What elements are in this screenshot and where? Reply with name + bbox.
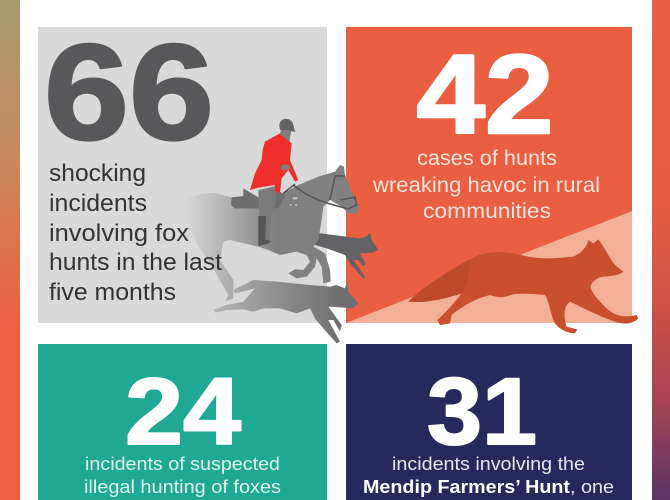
description: cases of hunts	[417, 147, 557, 170]
panel: 42 cases	[346, 27, 638, 333]
description: wreaking havoc in rural	[372, 174, 600, 197]
description: incidents involving the	[392, 453, 585, 474]
description: illegal hunting of foxes	[84, 476, 281, 497]
right gradient border	[652, 0, 670, 500]
description	[84, 453, 281, 497]
description	[363, 453, 614, 497]
number 66: 66	[44, 16, 214, 168]
light triangle	[346, 211, 632, 323]
boot	[258, 216, 272, 246]
illustration: huntsman on horse with hounds	[185, 119, 378, 343]
bridle and reins	[283, 176, 357, 209]
hound behind horse	[310, 233, 378, 278]
description	[372, 147, 600, 223]
saddle	[231, 188, 286, 208]
description: 66 incidents: involving fox	[49, 220, 189, 247]
breeches	[258, 186, 277, 242]
description: communities	[423, 200, 551, 223]
description: 66 incidents: shocking	[49, 160, 146, 187]
rider	[250, 119, 298, 246]
horse	[185, 165, 359, 302]
panel: 31 incidents	[346, 344, 632, 500]
riding helmet	[279, 119, 296, 132]
description: , one	[570, 476, 614, 497]
left gradient border	[0, 0, 20, 500]
front hound	[214, 280, 358, 343]
breastplate marks	[289, 197, 298, 206]
description: incidents of suspected	[85, 453, 280, 474]
icon: running fox	[408, 239, 638, 333]
number 42: 42	[416, 32, 554, 157]
face	[280, 127, 292, 142]
hand	[281, 164, 290, 170]
red jacket	[250, 133, 298, 193]
description: 66 incidents	[49, 160, 222, 306]
number 31: 31	[427, 359, 537, 465]
description: 66 incidents: hunts in the last	[49, 249, 222, 276]
panel: 24 incidents	[38, 344, 327, 500]
description: Mendip Farmers’ Hunt	[363, 476, 570, 497]
panel: grey background with 66	[38, 16, 327, 323]
description: 66 incidents: five months	[49, 279, 176, 306]
description: 66 incidents: incidents	[49, 190, 147, 217]
number 24: 24	[125, 359, 241, 465]
